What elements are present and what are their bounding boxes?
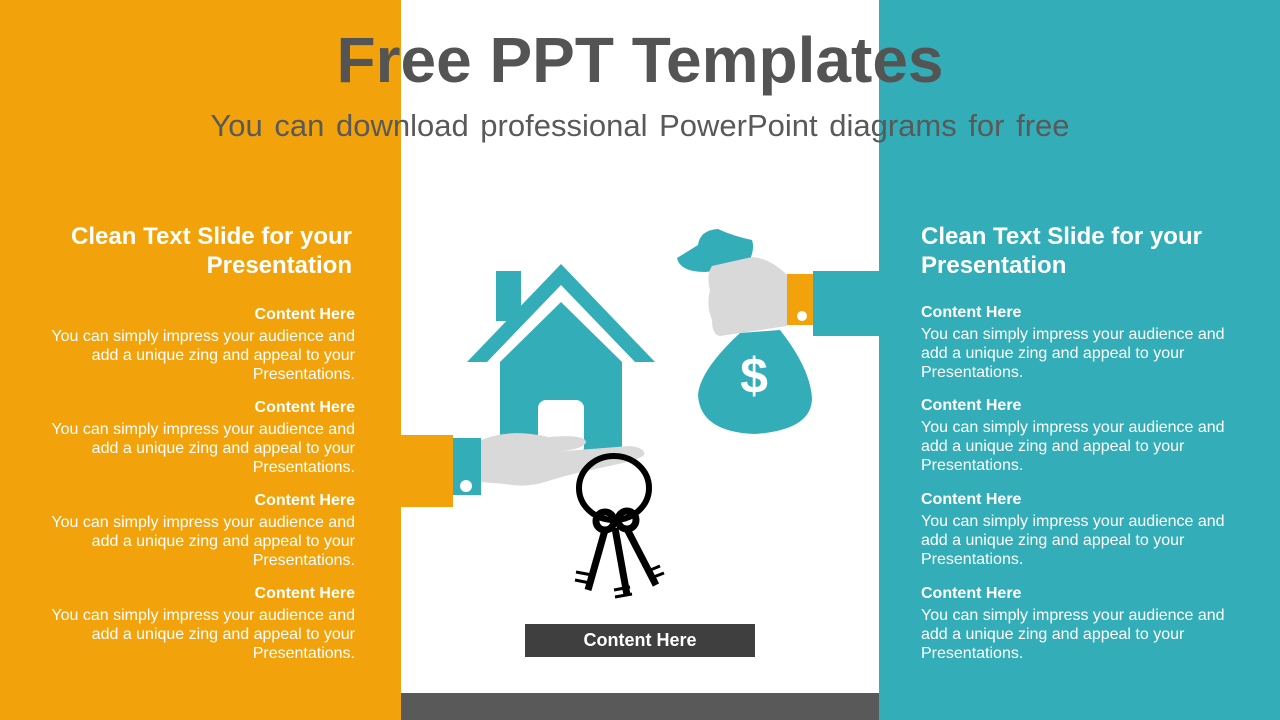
left orange panel (0, 0, 401, 720)
left block 1: Content Here (255, 306, 355, 323)
bottom gray bar (401, 693, 879, 720)
right block 4: Content Here (921, 585, 1021, 602)
icon: right hand with money bag (677, 229, 880, 434)
left heading (71, 223, 352, 279)
right text blocks (921, 304, 1225, 662)
title: Free PPT Templates (336, 24, 944, 96)
left block 1: You can simply impress your audience and add a unique zing and appeal to your Presentations. (51, 328, 355, 383)
caption box (525, 624, 755, 657)
left block 2: Content Here (255, 399, 355, 416)
right block 1: You can simply impress your audience and add a unique zing and appeal to your Presentations. (921, 326, 1225, 381)
right heading: Presentation (921, 252, 1066, 279)
icon: left hand with keys (400, 433, 664, 597)
right heading (921, 223, 1202, 279)
right block 1: Content Here (921, 304, 1021, 321)
left block 2: You can simply impress your audience and add a unique zing and appeal to your Presentations. (51, 421, 355, 476)
subtitle: You can download professional PowerPoint diagrams for free (210, 108, 1070, 143)
left block 3: Content Here (255, 492, 355, 509)
right heading: Clean Text Slide for your (921, 223, 1202, 250)
icon: right hand with money bag: $ (740, 348, 768, 404)
left heading: Clean Text Slide for your (71, 223, 352, 250)
right block 3: Content Here (921, 491, 1021, 508)
left text blocks (51, 306, 355, 662)
caption box: Content Here (583, 630, 696, 650)
icon: house (467, 264, 655, 455)
left block 4: You can simply impress your audience and add a unique zing and appeal to your Presentations. (51, 607, 355, 662)
right block 4: You can simply impress your audience and add a unique zing and appeal to your Presentations. (921, 607, 1225, 662)
right block 3: You can simply impress your audience and add a unique zing and appeal to your Presentations. (921, 513, 1225, 568)
right block 2: You can simply impress your audience and add a unique zing and appeal to your Presentations. (921, 419, 1225, 474)
right teal panel (879, 0, 1280, 720)
right block 2: Content Here (921, 397, 1021, 414)
left block 3: You can simply impress your audience and add a unique zing and appeal to your Presentations. (51, 514, 355, 569)
left heading: Presentation (207, 252, 352, 279)
left block 4: Content Here (255, 585, 355, 602)
